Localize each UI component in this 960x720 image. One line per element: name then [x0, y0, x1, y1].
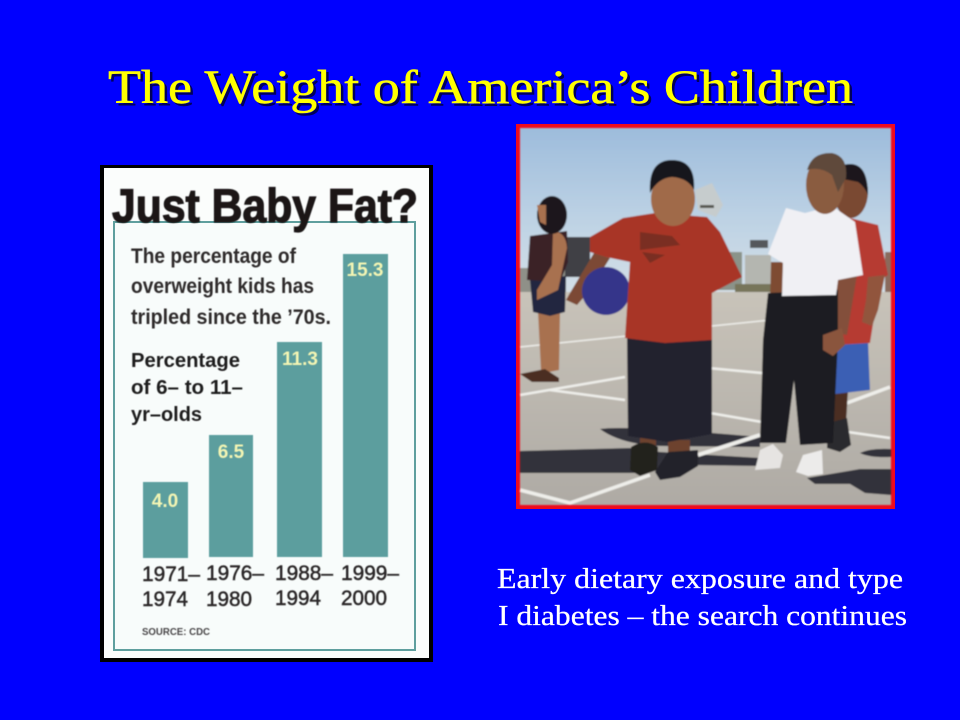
- bar values: [152, 260, 383, 512]
- photo frame: [516, 124, 895, 509]
- chart frame: [100, 165, 433, 662]
- court lines: [520, 320, 890, 438]
- title: The Weight of America’s Children: [110, 64, 856, 116]
- large boy in red shirt: [566, 160, 742, 480]
- bars: [143, 254, 388, 558]
- caption: Early dietary exposure and type: [497, 564, 903, 595]
- chart inner border: [114, 222, 415, 650]
- title: The Weight of America’s Children: [108, 61, 853, 114]
- caption: I diabetes – the search continues: [498, 601, 907, 632]
- chart axis label: Percentage: [131, 350, 240, 372]
- chart description: The percentage of: [131, 245, 297, 268]
- year labels: 2000: [341, 587, 387, 610]
- chart axis label: of 6– to 11–: [131, 377, 243, 399]
- ground: [520, 292, 891, 505]
- source note: SOURCE: CDC: [142, 627, 210, 638]
- bar values: 11.3: [282, 349, 318, 370]
- chart axis label: [131, 350, 243, 426]
- sky: [520, 128, 891, 294]
- chart description: overweight kids has: [131, 275, 314, 298]
- year labels: 1994: [275, 587, 321, 610]
- bar values: 15.3: [347, 260, 383, 281]
- background objects: [520, 183, 891, 292]
- boy in blue shorts: [825, 164, 888, 452]
- year labels: 1999–: [341, 562, 399, 585]
- photo scene: [520, 128, 891, 505]
- year labels: 1976–: [206, 562, 264, 585]
- year labels: 1980: [206, 588, 252, 611]
- chart description: [131, 245, 331, 329]
- year labels: [142, 562, 399, 611]
- girl in background: [520, 196, 568, 382]
- chart axis label: yr–olds: [131, 404, 202, 426]
- chart description: tripled since the ’70s.: [131, 306, 331, 329]
- chart paper: [104, 168, 429, 658]
- year labels: 1988–: [275, 562, 333, 585]
- shadows: [520, 428, 891, 495]
- year labels: 1971–: [142, 563, 200, 586]
- year labels: 1974: [142, 588, 188, 611]
- bar values: 4.0: [152, 491, 178, 512]
- bar values: 6.5: [218, 442, 245, 463]
- more court lines: [698, 435, 760, 455]
- caption: [497, 564, 907, 632]
- chart heading: Just Baby Fat?: [112, 179, 418, 232]
- panel: photo of children: [516, 124, 895, 509]
- panel: bar chart clipping: [100, 165, 433, 662]
- boy in white shirt: [755, 153, 863, 476]
